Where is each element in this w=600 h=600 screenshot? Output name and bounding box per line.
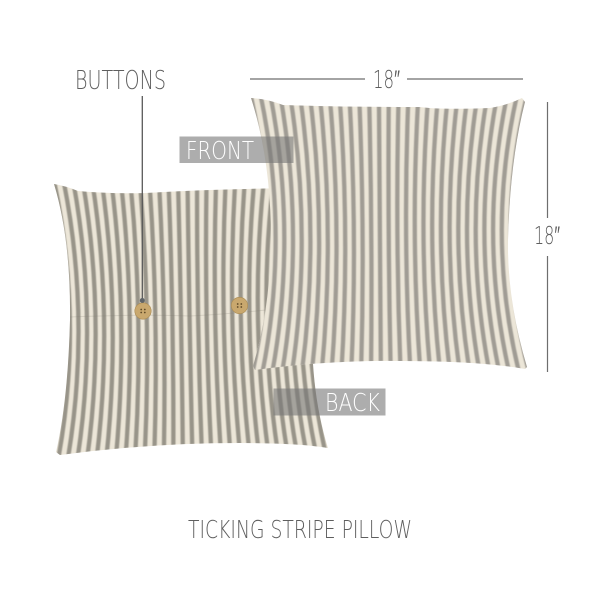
front pillow — [251, 98, 527, 370]
label: back — [274, 388, 386, 417]
dimension: height: 18″ — [534, 221, 560, 250]
label: front: FRONT — [186, 136, 254, 165]
flap seam — [70, 309, 275, 317]
back pillow — [54, 184, 328, 455]
button 2 — [231, 297, 248, 314]
title: TICKING STRIPE PILLOW — [188, 515, 412, 544]
button 1 — [135, 303, 151, 319]
dimension: width: 18″ — [373, 65, 400, 94]
label: back: BACK — [325, 388, 380, 417]
arrow: buttons leader line — [140, 96, 145, 303]
label: buttons: BUTTONS — [75, 66, 166, 96]
